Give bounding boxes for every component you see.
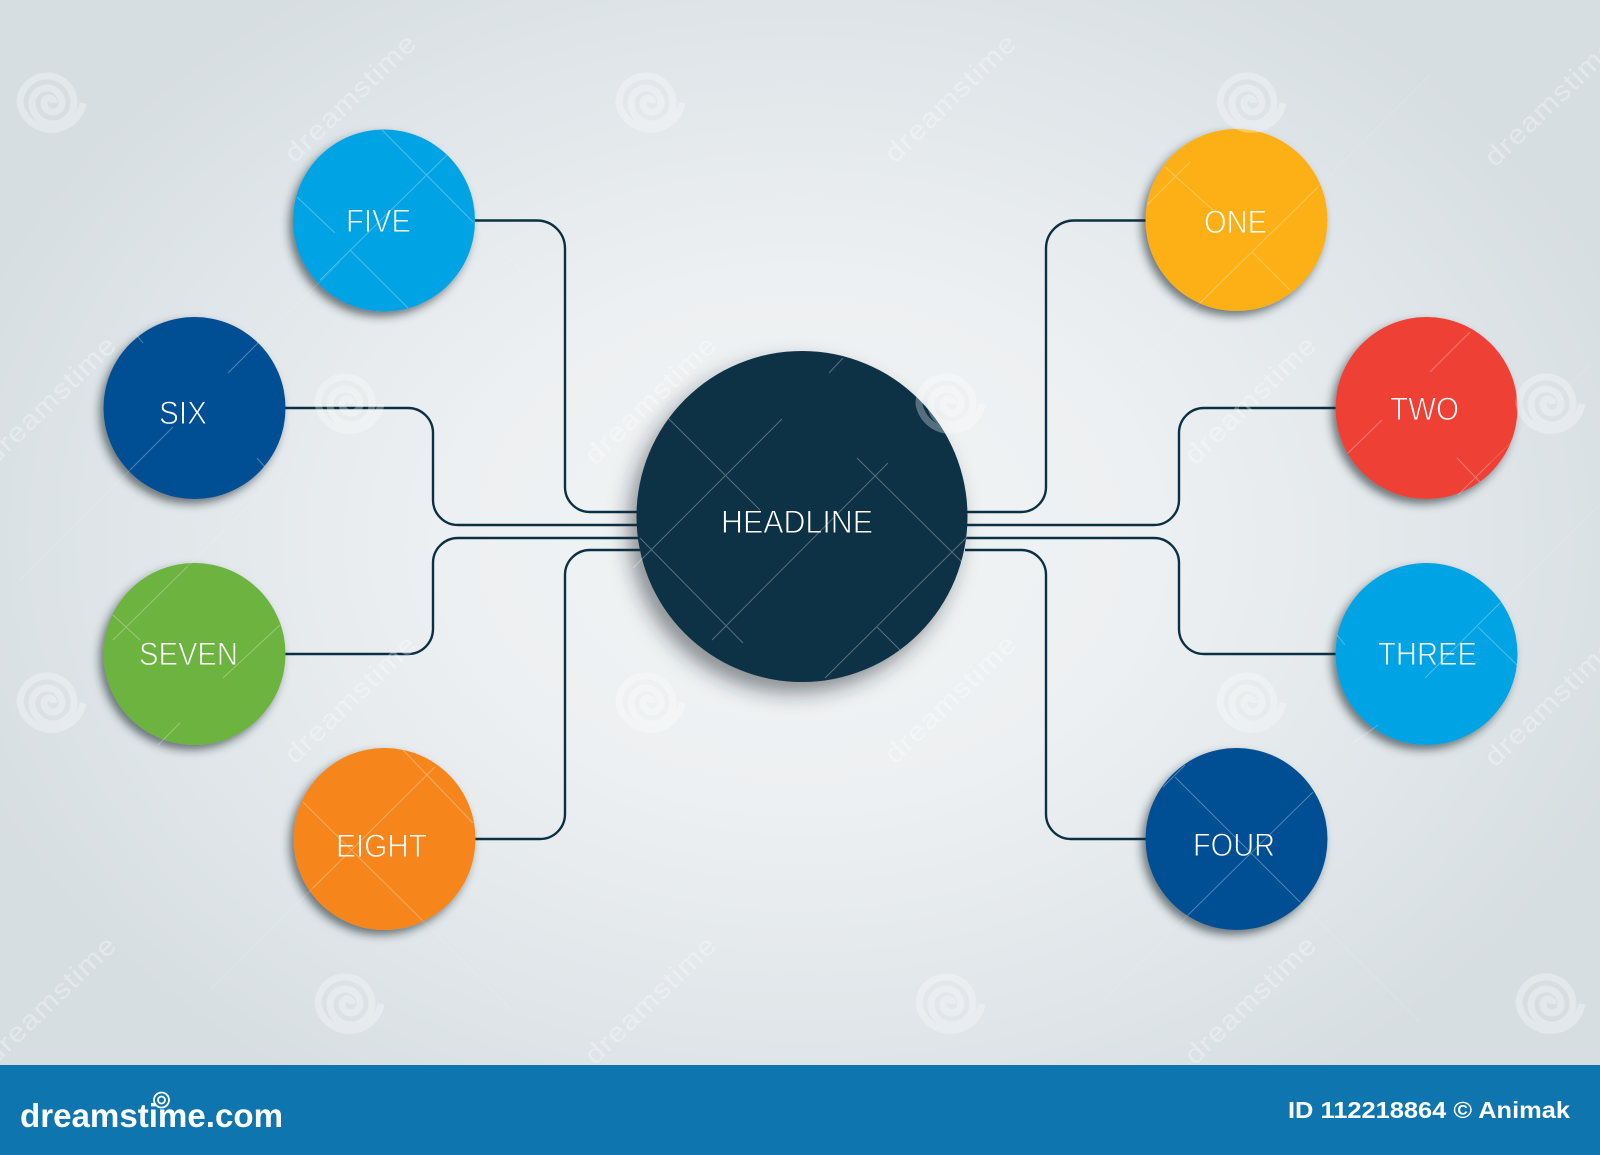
connector: one bbox=[965, 220, 1146, 512]
footer image id and credit: ID 112218864 © Animak bbox=[1288, 1097, 1571, 1123]
node: eight: EIGHT bbox=[336, 828, 427, 864]
node: seven bbox=[104, 563, 286, 745]
node: two: TWO bbox=[1390, 391, 1459, 427]
node: seven: SEVEN bbox=[139, 636, 238, 672]
node: five bbox=[293, 130, 475, 312]
connector: eight bbox=[475, 550, 640, 839]
spiral 8 bbox=[619, 676, 682, 729]
footer logo text: dreamstime.com bbox=[20, 1097, 283, 1134]
connector: seven bbox=[285, 538, 640, 654]
node: four bbox=[1146, 748, 1328, 930]
watermark text: dreamstime bbox=[1178, 329, 1323, 470]
watermark text: dreamstime bbox=[878, 628, 1023, 769]
spiral 1 bbox=[20, 76, 83, 129]
icon: logo spiral bbox=[154, 1092, 169, 1108]
spiral 5 bbox=[919, 377, 982, 430]
node: two bbox=[1336, 317, 1518, 499]
node: five: FIVE bbox=[346, 203, 411, 239]
connector lines bbox=[285, 220, 1336, 839]
spiral 9 bbox=[1220, 676, 1283, 729]
node: six: SIX bbox=[159, 395, 207, 431]
node: three: THREE bbox=[1378, 636, 1477, 672]
node: six bbox=[104, 317, 286, 499]
node: one: ONE bbox=[1204, 204, 1267, 240]
node: three bbox=[1336, 563, 1518, 745]
spiral 11 bbox=[919, 977, 982, 1030]
connector: three bbox=[965, 538, 1336, 654]
node: four: FOUR bbox=[1193, 827, 1275, 863]
watermark text: dreamstime bbox=[278, 27, 423, 168]
spiral 10 bbox=[318, 977, 381, 1030]
central circle: headline: HEADLINE bbox=[721, 504, 873, 540]
watermark text: dreamstime bbox=[578, 929, 723, 1070]
footer bar bbox=[0, 1065, 1600, 1155]
watermark text: dreamstime bbox=[1178, 929, 1323, 1070]
connector: four bbox=[965, 550, 1146, 839]
spiral 3 bbox=[1220, 76, 1283, 129]
spiral 6 bbox=[1519, 377, 1582, 430]
spiral 2 bbox=[619, 76, 682, 129]
node: one bbox=[1146, 129, 1328, 311]
central circle: headline bbox=[636, 351, 968, 682]
spiral 4 bbox=[318, 377, 381, 430]
watermark text: dreamstime bbox=[578, 329, 723, 470]
connector: six bbox=[285, 408, 640, 525]
connector: two bbox=[965, 408, 1336, 525]
node: eight bbox=[294, 748, 476, 930]
connector: five bbox=[475, 220, 640, 512]
spiral 7 bbox=[20, 676, 83, 729]
watermark text: dreamstime bbox=[278, 628, 423, 769]
spiral 12 bbox=[1519, 977, 1582, 1030]
watermark text: dreamstime bbox=[878, 27, 1023, 168]
